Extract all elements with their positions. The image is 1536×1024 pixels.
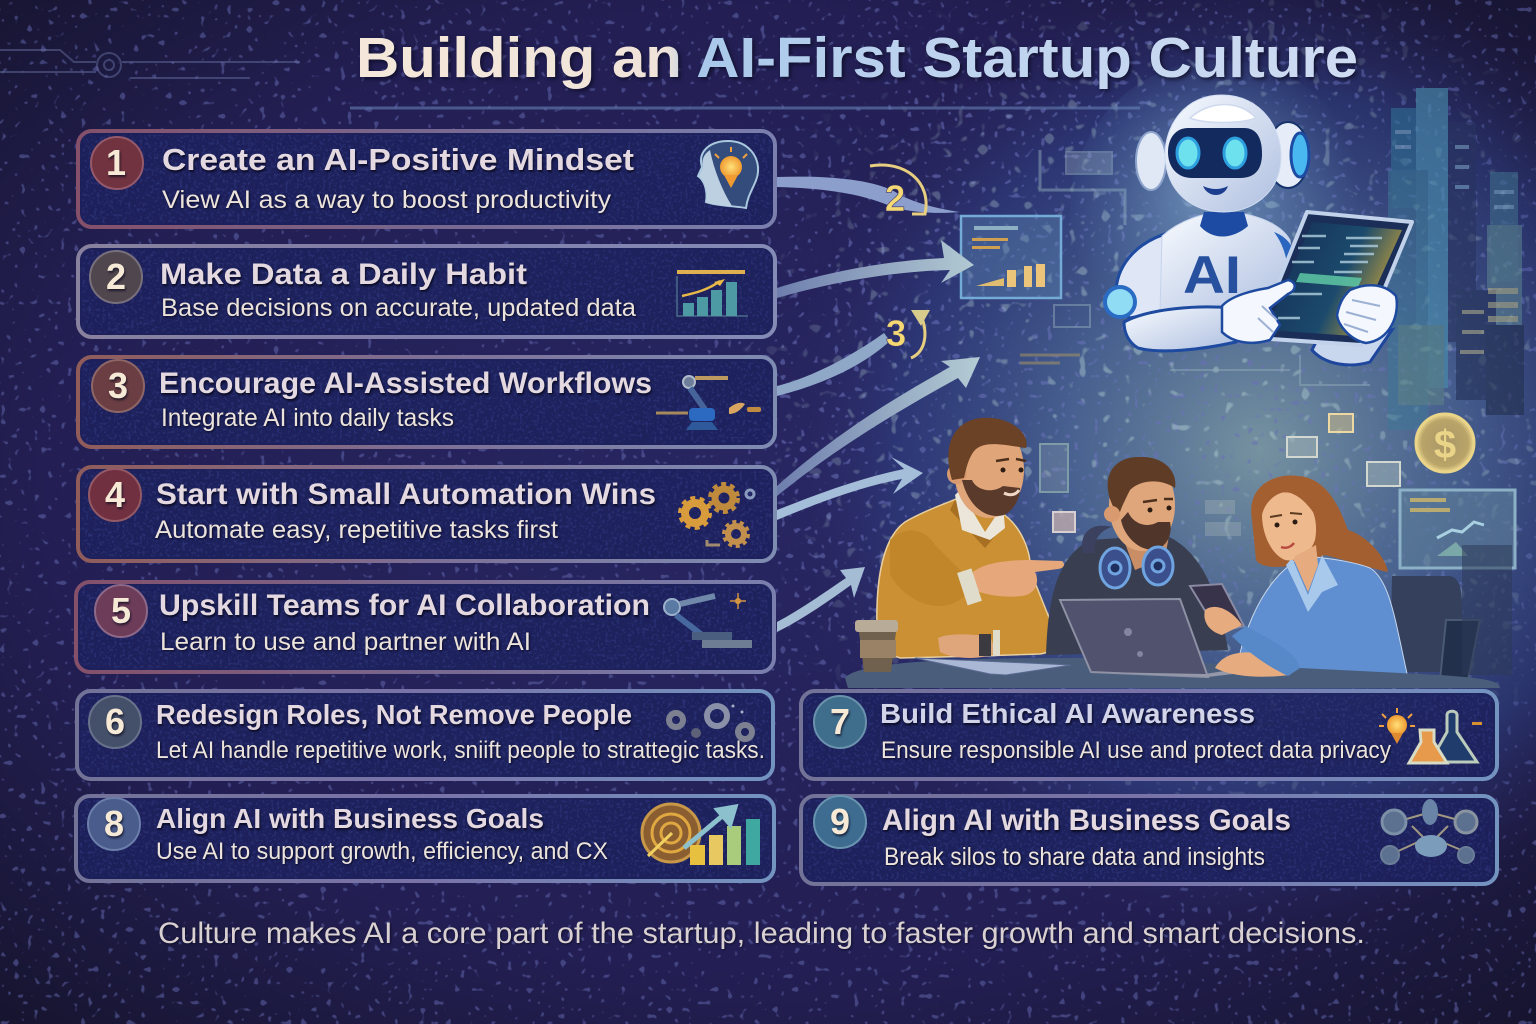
panel 9: [801, 796, 1497, 884]
panel 1: [78, 131, 775, 227]
robot visor: [1168, 128, 1262, 178]
panel 2: [78, 246, 775, 337]
team: man with headphones: [1046, 457, 1228, 655]
city skyline: [1388, 88, 1524, 430]
shirt collar: [955, 490, 1005, 540]
description 5: Learn to use and partner with AI: [160, 628, 531, 656]
robot forearm: [1124, 307, 1236, 351]
dollar coin: $: [1434, 423, 1456, 467]
arrow 6 toward team: [777, 567, 865, 632]
robot hand right: [1337, 285, 1397, 343]
robot torso: [1160, 212, 1296, 312]
heading 5: Upskill Teams for AI Collaboration: [159, 589, 650, 622]
dark sweater: [1046, 535, 1228, 655]
shirt: [1235, 555, 1408, 680]
robot far lower arm: [1312, 330, 1392, 365]
number 2: [90, 251, 142, 303]
dashboard chart panel: [961, 216, 1061, 298]
number 1: [91, 137, 143, 189]
pointing arm: [890, 530, 975, 606]
icon: robot arm: [656, 376, 761, 430]
shirt cuff on woman: [1232, 626, 1300, 676]
laptop: [1060, 599, 1258, 677]
team: man in yellow sweater: [877, 418, 1064, 658]
panel 8: [76, 796, 774, 881]
number 7: [814, 696, 866, 748]
dollar coin: [1416, 414, 1474, 472]
AI chest label: AI: [1183, 246, 1241, 305]
heading 7: Build Ethical AI Awareness: [880, 698, 1255, 729]
panel 7: [801, 691, 1497, 779]
arrow 3 to yellow 3: [777, 333, 890, 396]
description 9: Break silos to share data and insights: [884, 843, 1265, 871]
robot tablet: [1256, 212, 1412, 345]
sweater: [877, 498, 1056, 658]
number 7: 7: [830, 701, 850, 742]
arrow 4 to upper right: [777, 357, 980, 496]
shirt collar: [1286, 555, 1338, 612]
heading 1: Create an AI-Positive Mindset: [162, 142, 634, 177]
number 6: [89, 696, 141, 748]
hair fringe: [1261, 477, 1332, 530]
robot: [1070, 60, 1412, 365]
description 2: Base decisions on accurate, updated data: [161, 294, 636, 322]
arrow 5 toward team: [777, 457, 923, 520]
yellow number 2 badge: 2: [885, 178, 905, 219]
number 3: 3: [108, 365, 128, 406]
team: woman in blue shirt: [1235, 476, 1408, 680]
faded UI cards behind robot: [1020, 150, 1370, 385]
coffee cup: [855, 620, 898, 672]
robot smile: [1203, 186, 1228, 195]
face: [1262, 492, 1316, 560]
pointing hand: [973, 560, 1064, 597]
robot right ear: [1267, 122, 1309, 188]
head: [947, 418, 1027, 518]
number 3: [92, 360, 144, 412]
robot eye right: [1224, 138, 1246, 168]
title underline: [350, 106, 1140, 110]
headphones: [1082, 526, 1173, 588]
woman's hands: [1204, 607, 1290, 677]
robot left ear: [1136, 132, 1166, 190]
number 8: 8: [104, 803, 124, 844]
arrow 1 to yellow 2: [777, 177, 960, 213]
icon: gears: [680, 484, 754, 546]
floating app icons: [1040, 414, 1400, 536]
robot neck: [1200, 212, 1248, 236]
head: [1104, 457, 1175, 551]
description 6: Let AI handle repetitive work, sniift people to strattegic tasks.: [156, 737, 765, 764]
icon: gear rings: [669, 704, 752, 739]
icon: bulb and flasks: [1379, 708, 1482, 763]
robot hand left: [1222, 280, 1295, 343]
description 3: Integrate AI into daily tasks: [161, 404, 454, 432]
heading 9: Align AI with Business Goals: [882, 804, 1291, 837]
icon: connected network: [1381, 799, 1477, 864]
neck: [1294, 545, 1318, 592]
panel 5: [76, 582, 774, 672]
number 8: [88, 798, 140, 850]
footer tagline: Culture makes AI a core part of the startup, leading to faster growth and smart decisions.: [158, 917, 1365, 950]
number 5: [95, 585, 147, 637]
yellow number 3 badge: [886, 310, 930, 358]
long hair back: [1251, 476, 1388, 572]
arrow 2 to dashboard: [777, 240, 974, 298]
icon: robotic arm with spark: [664, 593, 752, 648]
number 4: [89, 469, 141, 521]
heading 4: Start with Small Automation Wins: [156, 478, 656, 511]
heading 6: Redesign Roles, Not Remove People: [156, 699, 632, 730]
panel 6: [77, 691, 773, 779]
number 4: 4: [105, 474, 125, 515]
number 6: 6: [105, 701, 125, 742]
description 4: Automate easy, repetitive tasks first: [155, 516, 558, 544]
neck: [1120, 530, 1170, 570]
table: [845, 658, 1500, 688]
title: Building an AI-First Startup Culture: [356, 26, 1358, 90]
heading 3: Encourage AI-Assisted Workflows: [159, 367, 652, 400]
yellow number 3 badge: 3: [886, 313, 906, 354]
office chair: [1390, 545, 1512, 680]
icon: head with lightbulb: [698, 141, 758, 208]
robot left shoulder: [1116, 232, 1172, 318]
panel 3: [78, 357, 775, 447]
number 2: 2: [106, 256, 126, 297]
number 9: 9: [830, 801, 850, 842]
yellow number 2 badge: [870, 165, 926, 219]
number 9: [814, 796, 866, 848]
robot head: [1165, 95, 1281, 212]
heading 8: Align AI with Business Goals: [156, 803, 544, 834]
notebook paper: [915, 658, 1071, 675]
number 1: 1: [106, 142, 126, 183]
icon: growth bar chart: [677, 270, 748, 316]
heading 2: Make Data a Daily Habit: [160, 258, 527, 291]
watch and lower hand: [938, 630, 1000, 658]
robot elbow joint: [1105, 287, 1135, 317]
description 7: Ensure responsible AI use and protect data privacy: [881, 737, 1391, 764]
decorative circuit lines top left: [0, 50, 300, 78]
phone: [1190, 584, 1244, 632]
description 1: View AI as a way to boost productivity: [162, 186, 612, 214]
panel 4: [78, 467, 775, 561]
robot eye left: [1177, 138, 1199, 168]
right monitor chart: [1400, 490, 1515, 568]
number 5: 5: [111, 590, 131, 631]
description 8: Use AI to support growth, efficiency, and CX: [156, 838, 608, 865]
icon: target and rising bars: [642, 804, 760, 865]
